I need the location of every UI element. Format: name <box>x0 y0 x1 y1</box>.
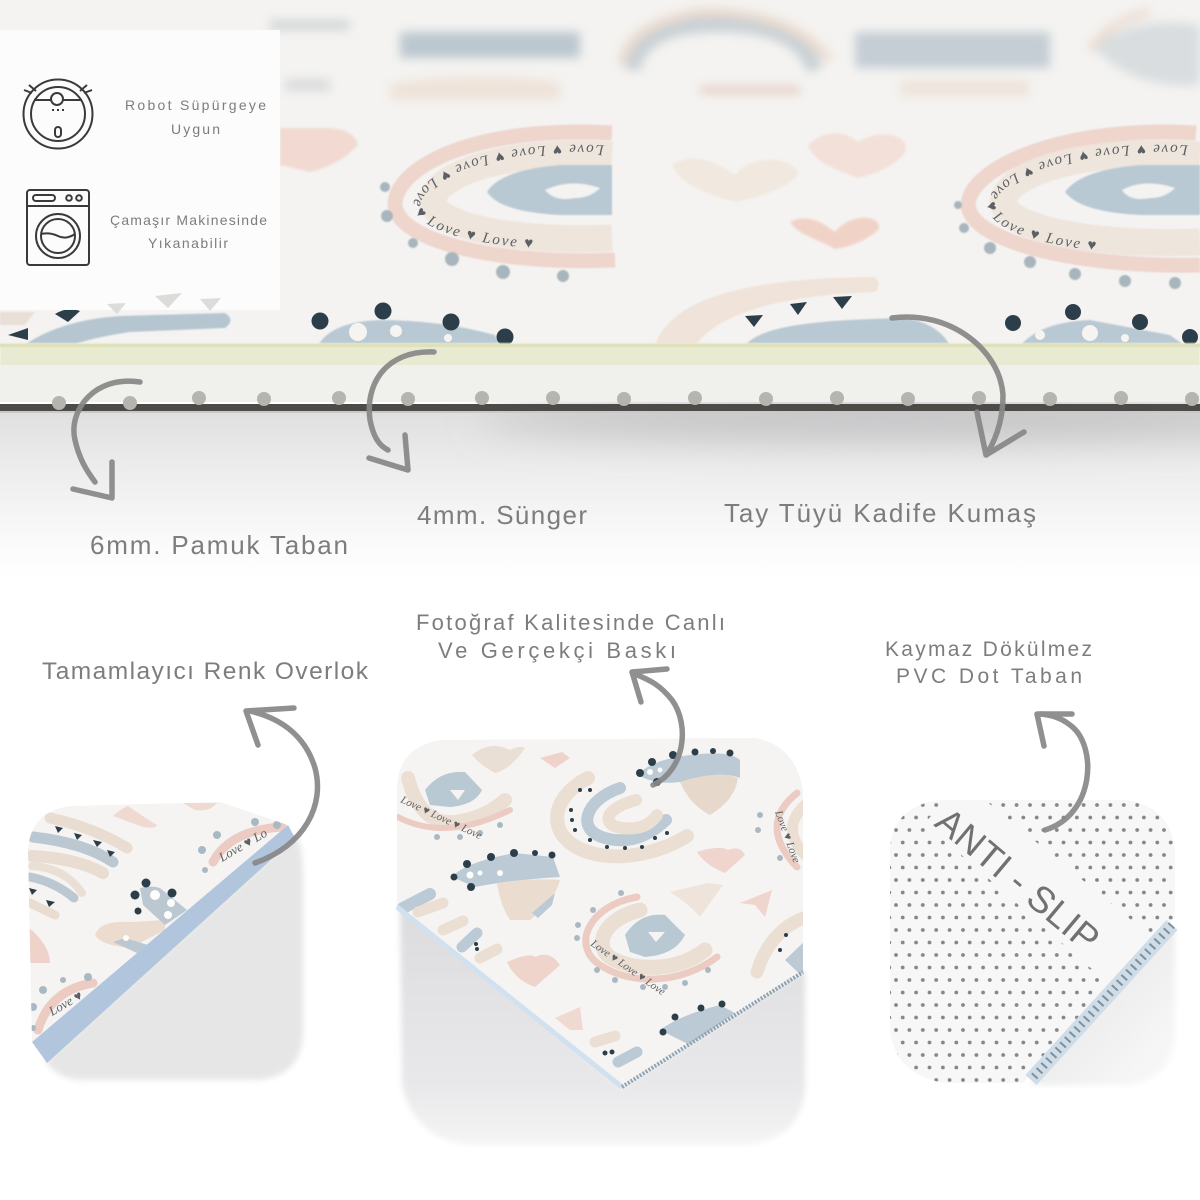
arrow: print quality <box>632 669 682 785</box>
label: velvet: Tay Tüyü Kadife Kumaş <box>724 498 1036 528</box>
lower rainbow shapes at rug edge <box>0 277 1185 346</box>
label: washing machine: Çamaşır Makinesinde <box>110 212 267 228</box>
script love text on rainbows: Love ♥ Love ♥ Love ♥ Love ♥ Love ♥ Love ♥ <box>414 144 604 248</box>
label: anti-slip: PVC Dot Taban <box>896 665 1082 688</box>
label: anti-slip <box>885 638 1092 688</box>
label: robot vacuum: Robot Süpürgeye <box>125 97 266 113</box>
arrow: cotton base <box>73 381 140 498</box>
label: washing machine: Yıkanabilir <box>148 235 228 251</box>
panel: overlock rug corner: Love ♥ <box>45 987 85 1019</box>
blue overlock edge <box>32 825 295 1063</box>
panel: overlock rug corner <box>20 790 310 1080</box>
script love text on rainbows: Love ♥ Love ♥ Love ♥ Love ♥ Love ♥ Love ♥ <box>987 144 1188 250</box>
panel: rug close-up photo <box>0 0 1200 344</box>
anti-slip stamp: ANTI - SLIP <box>928 800 1107 960</box>
label: anti-slip: Kaymaz Dökülmez <box>885 638 1092 661</box>
arrow: overlock <box>246 708 318 863</box>
arrow: velvet <box>892 317 1024 455</box>
panel: rug edge layers <box>0 343 1200 413</box>
rug edges <box>397 907 803 1087</box>
panel: anti-slip underside <box>880 790 1180 1090</box>
central rainbow <box>557 778 687 856</box>
lower rainbow <box>602 910 705 967</box>
small hearts below the panel <box>107 293 221 314</box>
blurred background pattern <box>270 12 1200 100</box>
top left rainbow <box>408 778 505 822</box>
left stripes <box>403 894 430 908</box>
stitched edge <box>1031 925 1172 1080</box>
label: print quality <box>416 610 725 663</box>
label: robot vacuum: Uygun <box>171 121 220 137</box>
label: cotton base: 6mm. Pamuk Taban <box>90 530 348 560</box>
script love text on rainbows <box>414 144 1188 250</box>
arrow: anti-slip <box>1037 714 1088 830</box>
label: robot vacuum <box>125 97 266 137</box>
arrow: foam <box>369 352 434 470</box>
icon: robot vacuum <box>24 80 92 148</box>
panel: print quality rug corner <box>390 730 810 1145</box>
panel: print quality rug corner: Love ♥ Love ♥ Love <box>587 937 668 998</box>
label: overlock: Tamamlayıcı Renk Overlok <box>42 658 369 685</box>
panel: overlock rug corner: Love ♥ Lo <box>215 825 270 865</box>
label: foam: 4mm. Sünger <box>417 500 587 530</box>
icon: washing machine <box>27 190 89 265</box>
label: washing machine <box>110 212 267 251</box>
panel: print quality rug corner: Love ♥ Love <box>772 808 802 865</box>
right rainbows <box>777 793 797 867</box>
hearts <box>280 128 906 249</box>
panel: print quality rug corner: Love ♥ Love ♥ Love <box>398 793 484 842</box>
rainbow circles <box>380 132 1200 289</box>
panel: floor shadow gradient <box>0 396 1200 580</box>
label: print quality: Fotoğraf Kalitesinde Canlı <box>416 610 725 635</box>
label: print quality: Ve Gerçekçi Baskı <box>438 638 676 663</box>
panel: care icons <box>0 30 280 314</box>
